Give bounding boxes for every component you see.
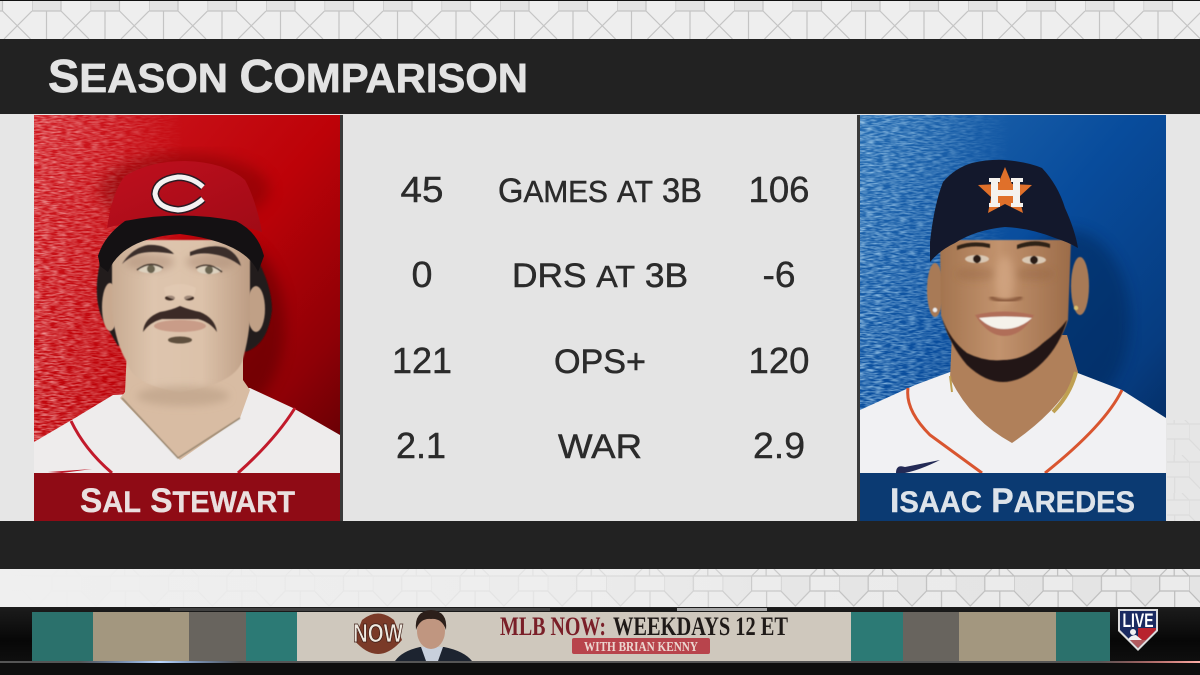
right margin tile hint [1167, 420, 1200, 521]
brows [122, 245, 174, 264]
smile [975, 312, 1034, 336]
neck [950, 335, 1078, 443]
title: SEASON COMPARISON [48, 50, 528, 102]
hair [97, 255, 272, 352]
nose [164, 295, 195, 302]
panel: Isaac Paredes [860, 115, 1166, 521]
stat row: games at 3B [400, 169, 810, 210]
stat row: WAR: 2.1 [396, 425, 446, 466]
stat row: WAR: 2.9 [753, 425, 805, 466]
ticker strip [0, 607, 1200, 675]
eyes [137, 264, 222, 274]
stat row: OPS+: 120 [748, 340, 810, 381]
stat row: OPS+: OPS+ [554, 343, 646, 381]
jersey [34, 388, 340, 473]
icon: MLB Now logo: NOW [353, 618, 403, 648]
bottom tile pattern band [0, 569, 1200, 607]
center stats panel [340, 115, 860, 521]
stat row: games at 3B: GAMES AT 3B [498, 172, 702, 210]
stat row: DRS at 3B [412, 254, 796, 295]
ears [102, 283, 265, 332]
name bar: Sal Stewart: SAL STEWART [80, 482, 295, 520]
bottom dark bar [0, 521, 1200, 569]
ad side panels [32, 612, 1110, 661]
name bar: Isaac Paredes: ISAAC PAREDES [890, 482, 1135, 520]
stat row: OPS+ [392, 340, 810, 381]
nose [990, 297, 1022, 301]
stat row: WAR [396, 425, 805, 466]
cap logo [978, 167, 1032, 213]
host portrait [395, 610, 472, 661]
icon: MLB Live shield [1118, 609, 1158, 651]
stat row: WAR: WAR [558, 428, 642, 466]
ad headline schedule: WEEKDAYS 12 ET [613, 612, 788, 641]
neck [120, 350, 250, 460]
icon: MLB Now logo [353, 614, 403, 654]
portrait: Sal Stewart [34, 154, 340, 473]
portrait: Isaac Paredes [860, 160, 1166, 473]
beard [942, 318, 1067, 382]
face [940, 239, 1072, 360]
ears [927, 257, 1089, 317]
face shading [962, 257, 1046, 303]
stat row: DRS at 3B: -6 [762, 254, 796, 295]
stat row: DRS at 3B: DRS AT 3B [512, 257, 688, 295]
face shading [126, 253, 234, 406]
icon: MLB Live shield: LIVE [1122, 611, 1154, 632]
jersey [860, 370, 1166, 473]
cap [930, 160, 1078, 262]
top tile pattern band [0, 0, 1200, 39]
cap logo [155, 177, 203, 210]
stat row: OPS+: 121 [392, 340, 452, 381]
title bar [0, 39, 1200, 114]
brows [957, 242, 990, 250]
name bar: Sal Stewart [34, 473, 340, 521]
name bar: Isaac Paredes [860, 473, 1166, 521]
ad headline: MLB NOW: [500, 612, 606, 641]
cap [107, 161, 262, 232]
panel: Sal Stewart [34, 115, 340, 521]
stat row: games at 3B: 106 [748, 169, 810, 210]
moustache and lips [143, 306, 217, 332]
ad banner [297, 610, 851, 661]
face [112, 240, 250, 392]
stat row: games at 3B: 45 [400, 169, 444, 210]
eyes [965, 255, 1046, 264]
ad button: WITH BRIAN KENNY [584, 640, 698, 655]
stat row: DRS at 3B: 0 [412, 254, 432, 295]
